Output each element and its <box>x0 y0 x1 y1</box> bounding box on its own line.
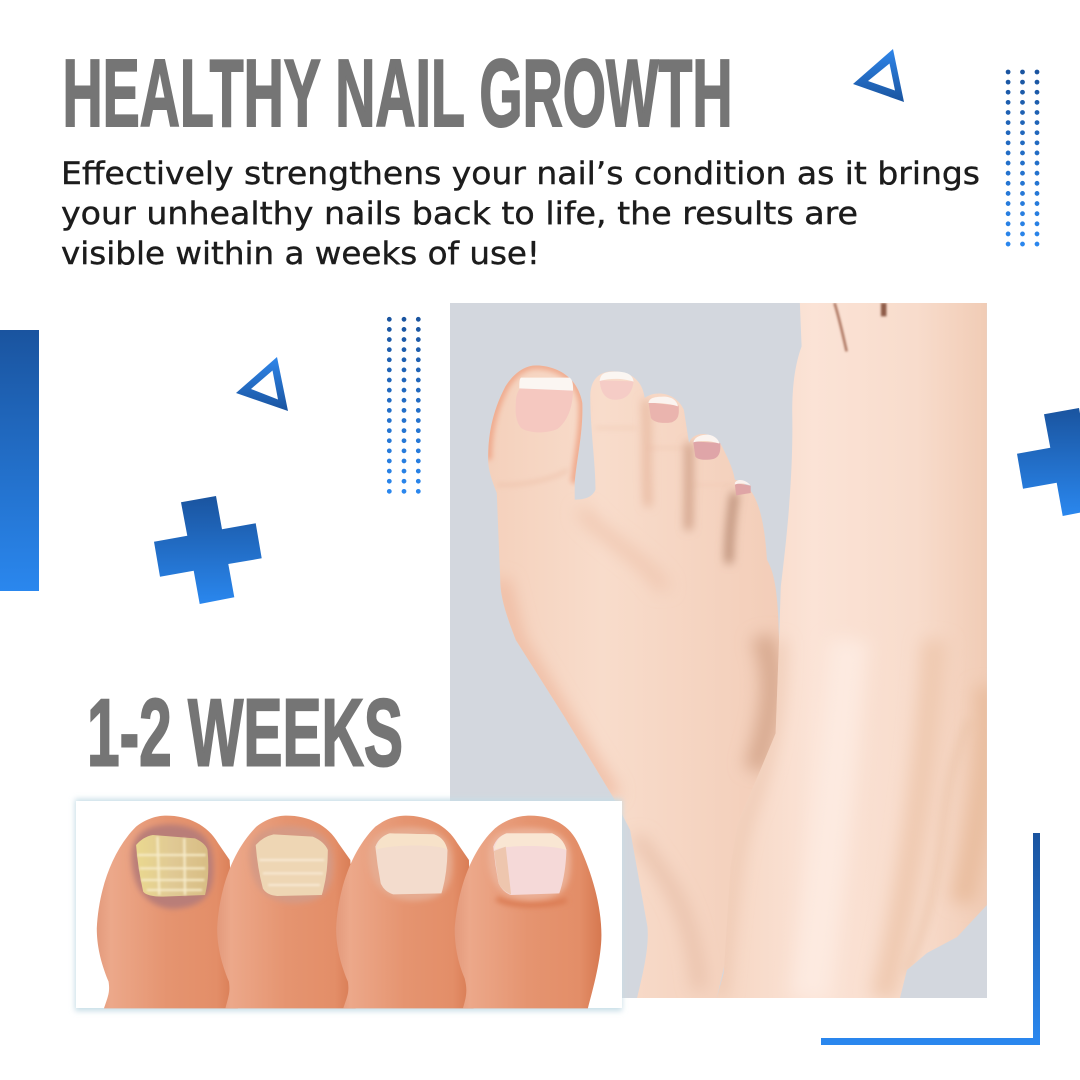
photo: feet <box>450 303 1004 1003</box>
icon: triangle top <box>853 49 904 102</box>
icon: triangle middle <box>236 357 288 411</box>
panel: nail progression illustration <box>75 799 622 1011</box>
left foot <box>488 366 779 998</box>
toe 4 <box>455 816 601 1008</box>
description text: your unhealthy nails back to life, the results are <box>61 196 858 232</box>
icon: plus left <box>154 496 262 604</box>
toe nails <box>516 372 751 495</box>
heading: 1-2 weeks: 1-2 WEEKS <box>87 680 403 786</box>
right foot <box>710 303 1004 1003</box>
description text <box>61 156 980 272</box>
dot grid middle <box>389 319 418 493</box>
description text: Effectively strengthens your nail’s condition as it brings <box>61 156 980 192</box>
corner bracket <box>821 833 1036 1042</box>
toe 3 <box>336 816 474 1008</box>
toe 2 <box>217 816 356 1008</box>
icon: plus right <box>1017 408 1080 516</box>
toe 1 <box>97 816 238 1008</box>
description text: visible within a weeks of use! <box>61 236 540 272</box>
left blue bar <box>0 330 39 591</box>
dot grid top right <box>1008 72 1037 246</box>
